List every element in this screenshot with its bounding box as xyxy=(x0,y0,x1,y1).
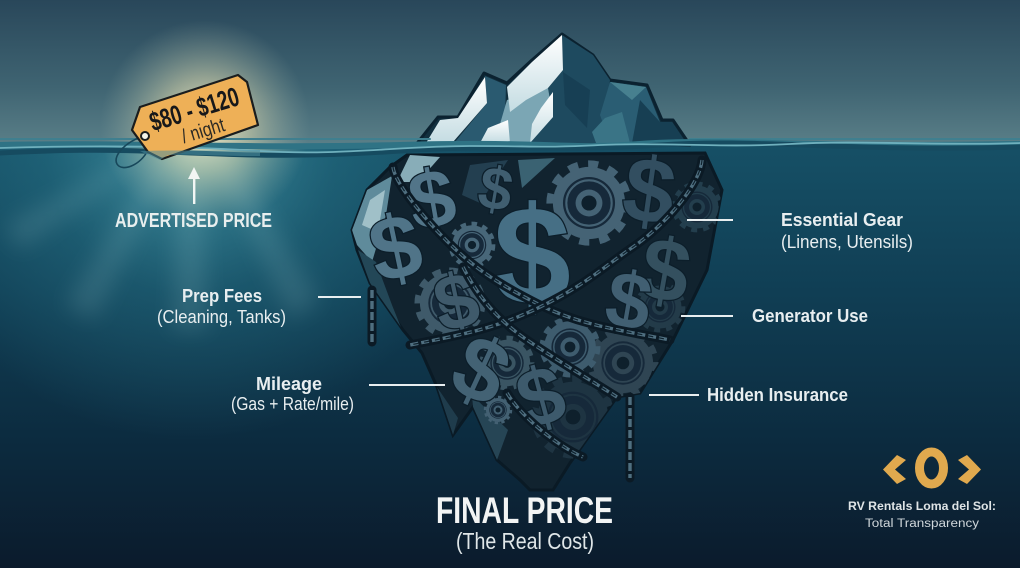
price tag xyxy=(116,75,258,168)
label: essential gear xyxy=(781,210,913,252)
chain: hanging right xyxy=(626,397,634,478)
dollar signs: $ xyxy=(493,177,571,334)
label: prep fees xyxy=(157,286,286,327)
tag body xyxy=(132,75,258,159)
label: mileage: (Gas + Rate/mile) xyxy=(231,394,354,414)
brand logo xyxy=(848,452,996,530)
label: mileage xyxy=(231,374,354,414)
water surface waves xyxy=(0,139,1020,155)
background: sky xyxy=(0,0,1020,145)
iceberg: snow peaks xyxy=(426,35,563,143)
dollar signs: $ xyxy=(617,137,682,245)
tag unit: / night xyxy=(179,114,228,148)
chain: centre diagonal xyxy=(463,267,617,397)
logo name: RV Rentals Loma del Sol: xyxy=(848,501,996,513)
label: mileage: Mileage xyxy=(256,374,322,394)
leader: hidden insurance xyxy=(649,394,699,396)
underwater glow xyxy=(0,145,560,568)
label: prep fees: Prep Fees xyxy=(182,286,262,306)
label: essential gear: Essential Gear xyxy=(781,210,903,230)
chain: upper right to left xyxy=(410,160,702,345)
leader: generator use xyxy=(681,315,733,317)
dollar signs: $ xyxy=(402,151,463,249)
leader: mileage xyxy=(369,384,445,386)
label: prep fees: (Cleaning, Tanks) xyxy=(157,307,286,327)
label: advertised price: ADVERTISED PRICE xyxy=(115,210,272,232)
iceberg xyxy=(352,34,722,490)
iceberg: gears and dollar signs xyxy=(361,137,720,455)
dollar signs: $ xyxy=(599,253,658,349)
iceberg: tip outline xyxy=(415,34,690,146)
background: ocean xyxy=(0,145,1020,568)
iceberg: submerged mass xyxy=(352,153,722,490)
dollar signs: $ xyxy=(633,217,698,323)
final price subheading: (The Real Cost) xyxy=(456,528,594,554)
iceberg: submerged ice facets xyxy=(352,155,555,460)
leader: prep fees xyxy=(318,296,361,298)
label: essential gear: (Linens, Utensils) xyxy=(781,232,913,252)
dollar signs: $ xyxy=(361,195,431,303)
iceberg: tip shaded facets xyxy=(455,35,686,143)
dollar signs: $ xyxy=(507,348,575,447)
sun glow xyxy=(100,20,310,230)
dollar signs: $ xyxy=(426,254,487,349)
logo icon: code zero xyxy=(883,452,981,484)
water over tag base xyxy=(140,150,260,160)
tag string xyxy=(116,136,148,168)
sunlight rays xyxy=(5,150,320,330)
tag price: $80 - $120 xyxy=(146,82,243,137)
chains around the iceberg xyxy=(372,160,702,478)
label: generator use: Generator Use xyxy=(752,306,868,326)
dollar signs: $ xyxy=(473,153,518,225)
gears, back layer xyxy=(417,164,720,455)
logo tagline: Total Transparency xyxy=(865,518,979,530)
tag hole xyxy=(141,132,149,140)
chain: hanging left xyxy=(368,290,376,342)
leader: essential gear xyxy=(687,219,733,221)
label: hidden insurance: Hidden Insurance xyxy=(707,385,848,405)
chain: lower xyxy=(507,393,583,457)
dollar signs: $ xyxy=(437,315,524,427)
dollar signs xyxy=(370,154,689,431)
arrow: advertised price xyxy=(188,167,200,204)
final price heading: FINAL PRICE xyxy=(436,490,613,531)
chain: upper left to lower right xyxy=(393,167,670,340)
